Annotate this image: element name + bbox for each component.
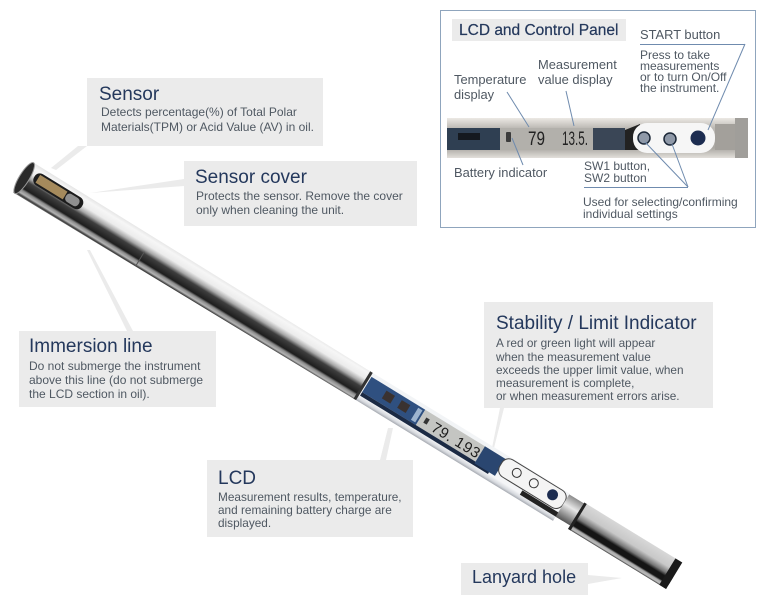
- callout: stability / limit indicator: measurement is complete,: [496, 376, 634, 390]
- panel leader lines: [507, 44, 745, 188]
- instrument: immersion tester tube: 79. 193: [428, 419, 483, 462]
- callout: sensor cover: Sensor cover: [195, 167, 308, 188]
- text: START description: Press to take: [640, 48, 710, 62]
- callout: stability / limit indicator: Stability / Limit Indicator: [496, 313, 697, 334]
- callout: sensor: Sensor: [99, 84, 160, 105]
- callout: sensor cover: only when cleaning the unit.: [196, 203, 344, 217]
- callout: immersion line: above this line (do not submerge: [29, 373, 203, 387]
- text: SW description: individual settings: [583, 207, 678, 221]
- LCD screen: [416, 410, 485, 462]
- panel photo: LCD strip: [447, 118, 748, 158]
- callout: immersion line: [19, 331, 216, 407]
- panel heading: LCD and Control Panel: [459, 22, 618, 39]
- label: measurement value display: value display: [538, 72, 613, 87]
- callout: stability / limit indicator: [484, 302, 713, 408]
- label: battery indicator: Battery indicator: [454, 165, 548, 180]
- steel lower shaft: [568, 502, 682, 589]
- control module: [496, 456, 569, 511]
- label: SW1 and SW2 buttons: SW1 button,: [584, 159, 650, 173]
- callout: immersion line: the LCD section in oil).: [29, 387, 150, 401]
- callout: sensor: [87, 78, 323, 146]
- leader lines from callouts to the instrument: [51, 146, 622, 584]
- callout: LCD: and remaining battery charge are: [218, 503, 392, 517]
- callout: lanyard hole: Lanyard hole: [472, 567, 576, 587]
- end cap: [11, 160, 38, 196]
- callout: sensor cover: Protects the sensor. Remove the cover: [196, 189, 403, 203]
- callout: immersion line: Immersion line: [29, 336, 153, 357]
- callout: sensor: Detects percentage(%) of Total Polar: [101, 105, 297, 119]
- callout: stability / limit indicator: exceeds the upper limit value, when: [496, 363, 684, 377]
- callout: stability / limit indicator: when the measurement value: [495, 350, 651, 364]
- text: START description: the instrument.: [640, 81, 719, 95]
- text: SW description: Used for selecting/confirming: [583, 195, 738, 209]
- panel photo: LCD strip: 79: [528, 129, 545, 150]
- callout: sensor cover: [184, 161, 417, 226]
- label: START button: START button: [640, 27, 720, 42]
- text: START description: or to turn On/Off: [640, 70, 727, 84]
- callout: sensor: Materials(TPM) or Acid Value (AV) in oil.: [101, 120, 314, 134]
- steel shaft end ring: [353, 371, 373, 400]
- collar: [556, 494, 584, 525]
- label: measurement value display: Measurement: [538, 57, 617, 72]
- label: SW1 and SW2 buttons: SW2 button: [584, 171, 647, 185]
- circuit board right: [474, 446, 505, 476]
- glass LCD section: [355, 372, 570, 521]
- callout: LCD: Measurement results, temperature,: [218, 490, 402, 504]
- callout: stability / limit indicator: A red or green light will appear: [496, 336, 655, 350]
- label: temperature display: Temperature: [454, 72, 526, 87]
- callout: LCD: LCD: [218, 468, 256, 489]
- circuit board left: [362, 377, 425, 425]
- panel: LCD and control panel: [440, 10, 756, 228]
- label: temperature display: display: [454, 87, 495, 102]
- callout: immersion line: Do not submerge the instrument: [29, 359, 201, 373]
- panel photo: LCD strip: 13.5.: [562, 129, 588, 150]
- sensor window: [31, 171, 86, 211]
- text: START description: measurements: [640, 59, 719, 73]
- callout: lanyard hole: [461, 563, 588, 595]
- steel upper shaft: [13, 162, 373, 401]
- callout: LCD: displayed.: [218, 516, 271, 530]
- callout: stability / limit indicator: or when measurement errors arise.: [496, 389, 680, 403]
- instrument: immersion tester tube: [11, 160, 683, 592]
- callout: LCD: [207, 460, 413, 537]
